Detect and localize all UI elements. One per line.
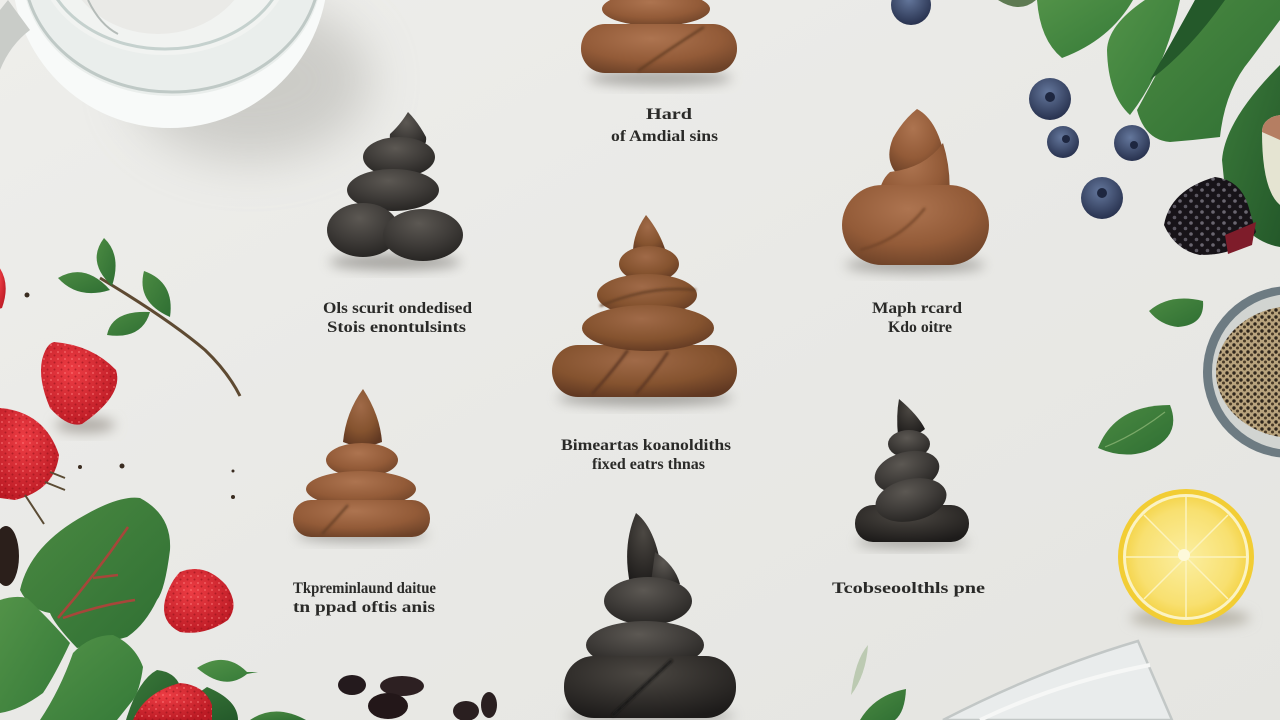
icon: dark stool, lower right xyxy=(855,399,969,548)
icon: bowl of seeds xyxy=(1203,286,1280,458)
text: top centre caption: Hard xyxy=(646,106,692,123)
text: top centre caption xyxy=(611,106,718,145)
icon: lemon slice xyxy=(1118,489,1254,628)
text: central caption: Bimeartas koanoldiths xyxy=(561,437,731,454)
text: upper left caption: Ols scurit ondedised xyxy=(323,300,472,317)
text: lower right caption: Tcobseoolthls pne xyxy=(832,580,985,597)
icon: small leaf, bottom right xyxy=(860,689,906,720)
icon: dark stool, upper left xyxy=(327,112,463,270)
text: lower left caption: Tkpreminlaund daitue xyxy=(293,580,436,597)
text: upper right caption: Maph rcard xyxy=(872,300,962,317)
icon: raspberries, left xyxy=(0,262,235,633)
icon: small leaf, right xyxy=(1149,299,1203,327)
icon: blueberries xyxy=(891,0,1150,219)
text: lower left caption: tn ppad oftis anis xyxy=(293,599,435,616)
icon: scattered dark berries, bottom xyxy=(338,675,497,720)
icon: leaves, top right xyxy=(998,0,1280,247)
text: lower left caption xyxy=(293,580,436,616)
icon: large dark stool, bottom centre xyxy=(564,513,736,720)
icon: brown stool, lower left xyxy=(293,389,430,542)
icon: large central brown stool xyxy=(552,215,737,406)
icon: branch with leaves, left xyxy=(58,238,240,396)
icon: mint leaf, right xyxy=(1098,405,1173,455)
icon: spinach leaves, bottom left xyxy=(0,498,306,720)
icon: brown stool, upper right xyxy=(842,109,989,273)
icon: blackberry xyxy=(1164,177,1256,255)
text: upper left caption: Stois enontulsints xyxy=(327,319,466,336)
text: central caption: fixed eatrs thnas xyxy=(592,456,705,473)
icon: top centre stool xyxy=(581,0,737,86)
text: central caption xyxy=(561,437,731,473)
icon: glass of water, top left xyxy=(0,0,370,160)
text: upper right caption: Kdo oitre xyxy=(888,319,952,336)
icon: small mint leaf, bottom centre xyxy=(851,645,868,695)
icon: glass, bottom right xyxy=(943,641,1172,720)
text: upper left caption xyxy=(323,300,472,336)
text: top centre caption: of Amdial sins xyxy=(611,128,718,145)
text: upper right caption xyxy=(872,300,962,336)
